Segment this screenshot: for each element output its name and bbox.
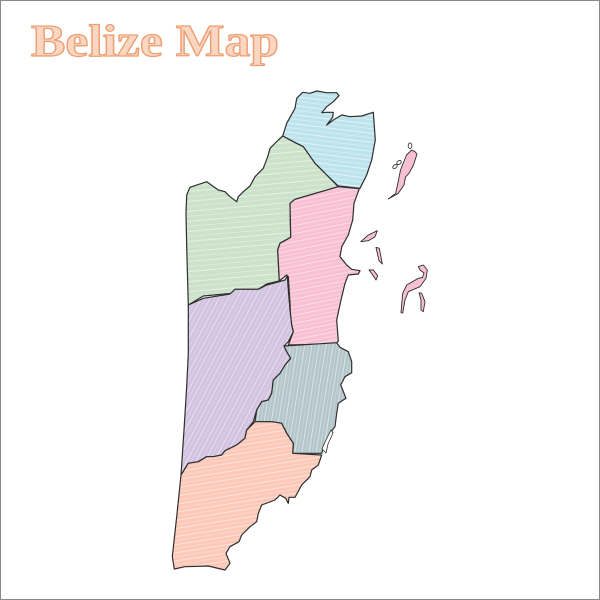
district: Belize (pink)	[278, 187, 360, 345]
district: Corozal (blue)	[283, 91, 375, 188]
district: Stann Creek (slate)	[255, 343, 352, 453]
islands: central cayes	[361, 231, 382, 280]
district: Cayo (purple)	[181, 276, 293, 475]
map of Belize districts	[172, 91, 427, 570]
islands: Turneffe atoll	[401, 265, 427, 313]
islands: Ambergris Caye group	[388, 143, 417, 199]
coastal cay near Stann Creek	[322, 430, 333, 453]
district: Toledo (salmon)	[172, 422, 322, 570]
title: Belize Map	[31, 16, 279, 66]
district: Orange Walk (green)	[186, 136, 338, 305]
